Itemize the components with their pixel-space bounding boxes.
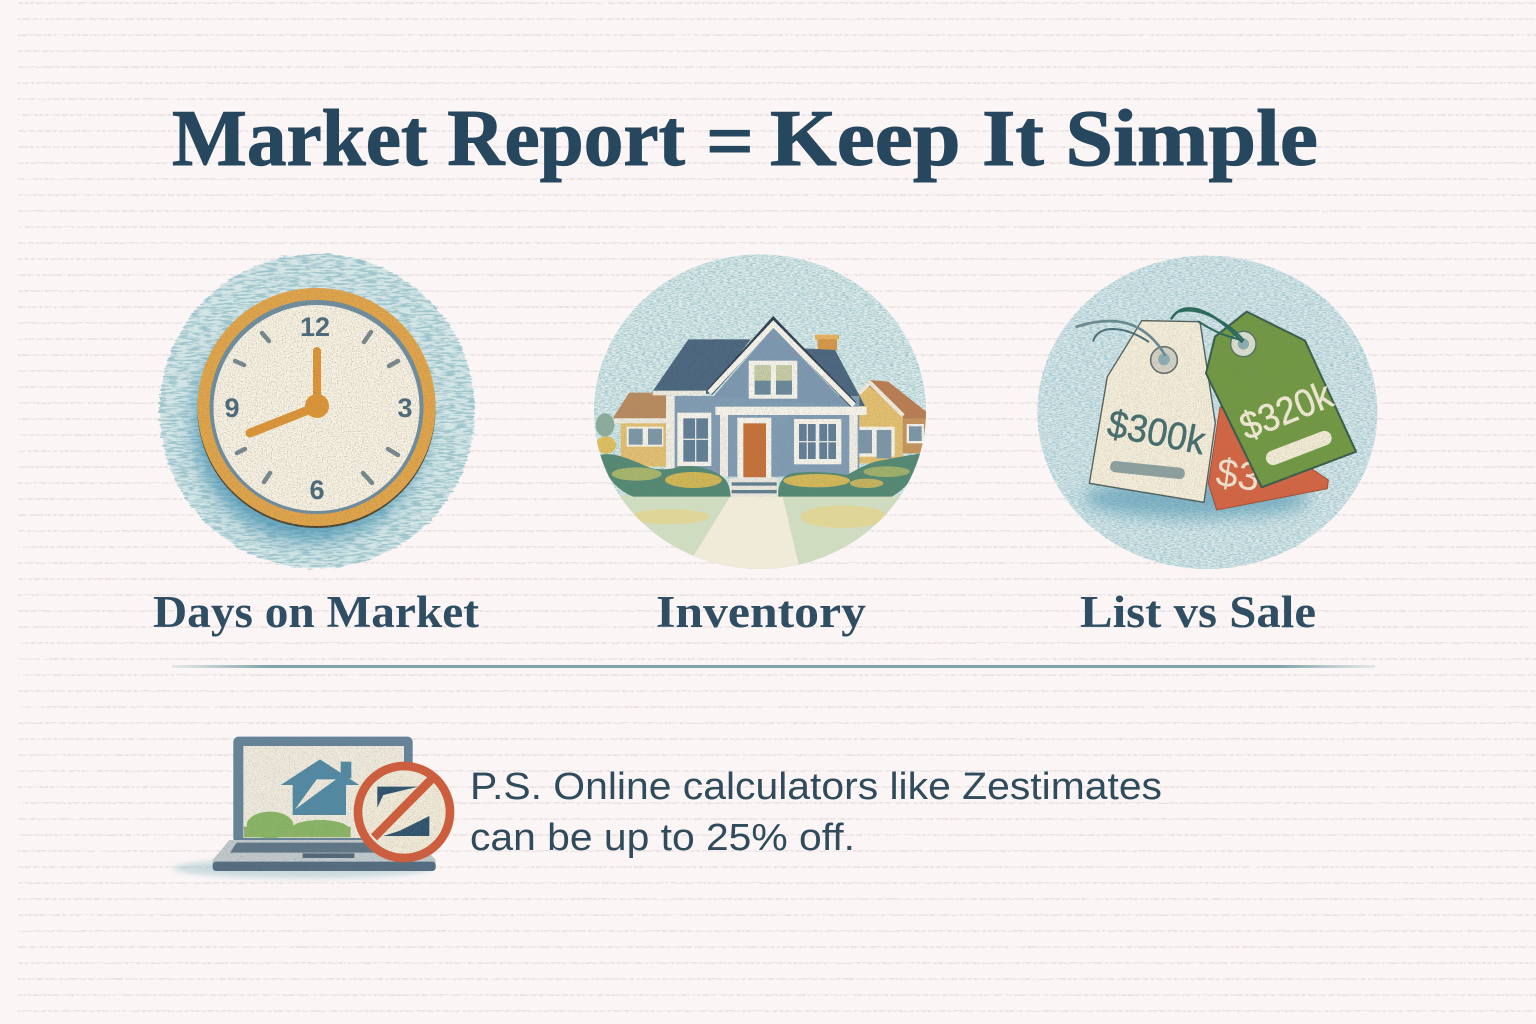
lawn xyxy=(619,495,901,569)
icon: clock xyxy=(159,253,475,569)
title: Market Report xyxy=(172,95,685,183)
icon: clock: 6 xyxy=(309,475,325,505)
title xyxy=(172,95,1318,186)
title: = xyxy=(706,98,754,186)
door xyxy=(737,418,771,478)
cream tag xyxy=(1089,321,1215,502)
icon: laptop with prohibited Zestimate sign xyxy=(173,737,450,878)
icon: house xyxy=(590,252,930,575)
main house walls xyxy=(653,321,867,477)
green tag: $320k xyxy=(1234,373,1339,449)
bushes xyxy=(596,413,922,497)
right neighbour house xyxy=(859,380,929,463)
roof and chimney xyxy=(652,335,865,406)
label: list vs sale: List vs Sale xyxy=(1080,587,1316,637)
green tag xyxy=(1206,312,1356,487)
panel: days on market xyxy=(153,253,479,637)
panel: inventory xyxy=(590,252,930,637)
note text xyxy=(470,766,1162,859)
strings xyxy=(1077,308,1243,355)
laptop base xyxy=(213,840,436,871)
panel: list vs sale xyxy=(1037,256,1377,637)
sky xyxy=(594,254,926,495)
icon: clock: 3 xyxy=(397,393,413,423)
note text: P.S. Online calculators like Zestimates xyxy=(470,766,1162,808)
label: inventory: Inventory xyxy=(656,587,867,637)
icon: price tags xyxy=(1037,256,1377,569)
icon: clock: 9 xyxy=(224,393,240,423)
laptop screen xyxy=(233,737,413,843)
label: days on market: Days on Market xyxy=(153,587,479,637)
path xyxy=(685,497,800,570)
icon: clock: 12 xyxy=(300,312,330,342)
cream tag: $300k xyxy=(1104,402,1209,463)
panel: P.S. note xyxy=(173,737,1162,878)
title: Keep It Simple xyxy=(770,95,1318,183)
divider xyxy=(172,665,1375,668)
windows xyxy=(677,361,841,466)
steps xyxy=(729,478,778,497)
prohibition sign xyxy=(358,766,450,858)
note text: can be up to 25% off. xyxy=(470,817,855,859)
red tag: $3 xyxy=(1213,450,1262,500)
red tag xyxy=(1208,407,1328,510)
left neighbour house xyxy=(613,393,667,467)
